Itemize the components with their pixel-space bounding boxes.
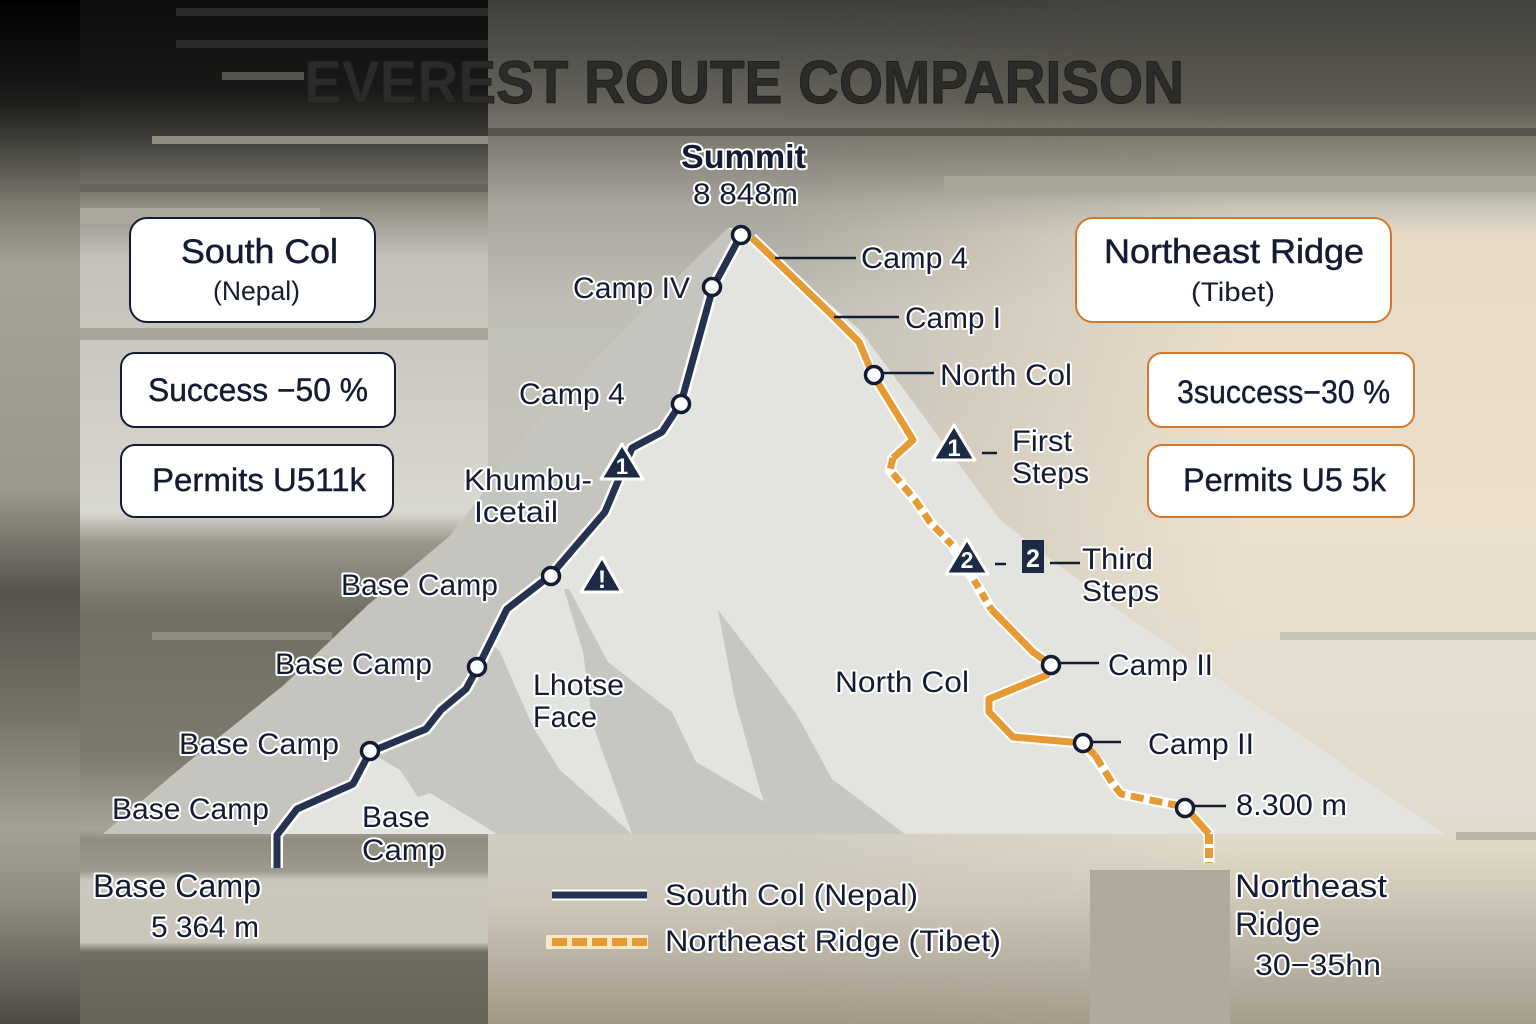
panel: Northeast Ridge permits: Permits U5 5k: [1183, 462, 1387, 498]
icon: numbered square 2: 2: [1026, 545, 1040, 573]
south route labels: Face: [533, 701, 597, 734]
icon: hazard triangle 1 left: [601, 444, 643, 479]
icon: hazard triangle 2 right: 2: [961, 547, 973, 573]
panel: South Col permits: Permits U511k: [152, 462, 367, 498]
summit label: [681, 138, 806, 211]
icon: hazard triangle 1 left: 1: [616, 454, 628, 479]
south route labels: Khumbu-: [464, 464, 592, 497]
north route labels: Steps: [1012, 457, 1089, 490]
panel: Northeast Ridge success: [1148, 353, 1414, 427]
legend swatch: Northeast Ridge core: [552, 938, 647, 946]
route nodes: [362, 226, 1194, 816]
panel: Northeast Ridge permits: [1148, 445, 1414, 517]
south route labels: Camp IV: [573, 272, 690, 305]
icon: numbered square 2: [1022, 540, 1044, 573]
south route labels: Camp: [362, 834, 445, 867]
legend swatch: South Col: [552, 890, 647, 900]
north route labels: Camp I: [905, 302, 1001, 335]
south route labels: Base Camp: [179, 728, 339, 761]
north route labels: Northeast: [1235, 868, 1387, 904]
north route labels: 30−35hn: [1255, 949, 1381, 982]
panel: South Col header: [130, 218, 375, 322]
panel: South Col header: (Nepal): [213, 276, 300, 306]
icon: warning triangle: [581, 557, 622, 594]
lower ridge shadow two: [564, 589, 795, 834]
leader lines: [775, 258, 1226, 806]
icon: hazard triangle 2 right: [946, 539, 988, 574]
panel: Northeast Ridge header: (Tibet): [1191, 277, 1275, 307]
north route labels: Camp II: [1108, 649, 1213, 682]
north route labels: Camp II: [1148, 728, 1254, 761]
north route labels: First: [1012, 425, 1073, 458]
legend: [546, 879, 1001, 958]
lower ridge shadow one: [370, 642, 632, 834]
north route labels: North Col: [940, 359, 1072, 392]
north route labels: Ridge: [1235, 906, 1320, 942]
icon: hazard triangle 1 right: 1: [947, 435, 961, 462]
legend swatch: South Col core: [552, 892, 647, 898]
summit label: 8 848m: [693, 178, 798, 211]
south route labels: Icetail: [474, 496, 558, 529]
north route labels: Steps: [1082, 575, 1159, 608]
icon: warning triangle: !: [598, 566, 606, 594]
summit label: Summit: [681, 138, 806, 175]
legend label: South Col: South Col (Nepal): [665, 879, 918, 912]
south route labels: Base Camp: [341, 569, 498, 602]
panel: South Col permits: [121, 445, 393, 517]
panel: Northeast Ridge header: Northeast Ridge: [1104, 233, 1364, 271]
icon: hazard triangle 1 right: [933, 425, 975, 462]
south route labels: Lhotse: [533, 669, 624, 702]
south route labels: 5 364 m: [151, 911, 259, 944]
south route labels: Base Camp: [93, 868, 261, 904]
left shadow face: [103, 228, 741, 834]
legend label: Northeast Ridge: Northeast Ridge (Tibet): [665, 925, 1001, 958]
title: EVEREST ROUTE COMPARISON: [304, 49, 1184, 116]
panel: Northeast Ridge header: [1076, 218, 1391, 322]
south route labels: [93, 272, 690, 944]
north route labels: 8.300 m: [1236, 789, 1347, 822]
legend swatch: Northeast Ridge: [546, 935, 648, 949]
Northeast Ridge route: [752, 238, 1209, 863]
panel: South Col header: South Col: [181, 233, 338, 271]
panel: South Col success: Success −50 %: [148, 372, 368, 408]
mountain base light face: [103, 228, 1444, 834]
north route labels: Camp 4: [861, 242, 968, 275]
north route labels: Third: [1082, 543, 1153, 576]
south route labels: Camp 4: [519, 378, 625, 411]
north route labels: [835, 242, 1387, 982]
south route labels: Base Camp: [275, 648, 432, 681]
south route labels: Base: [362, 801, 430, 834]
south route labels: Base Camp: [112, 793, 269, 826]
South Col route: [277, 235, 741, 868]
panel: South Col success: [121, 353, 395, 427]
mountain: [103, 228, 1444, 834]
panel: Northeast Ridge success: 3success−30 %: [1177, 374, 1390, 410]
north route labels: North Col: [835, 666, 969, 699]
lower ridge shadow three: [718, 610, 905, 834]
